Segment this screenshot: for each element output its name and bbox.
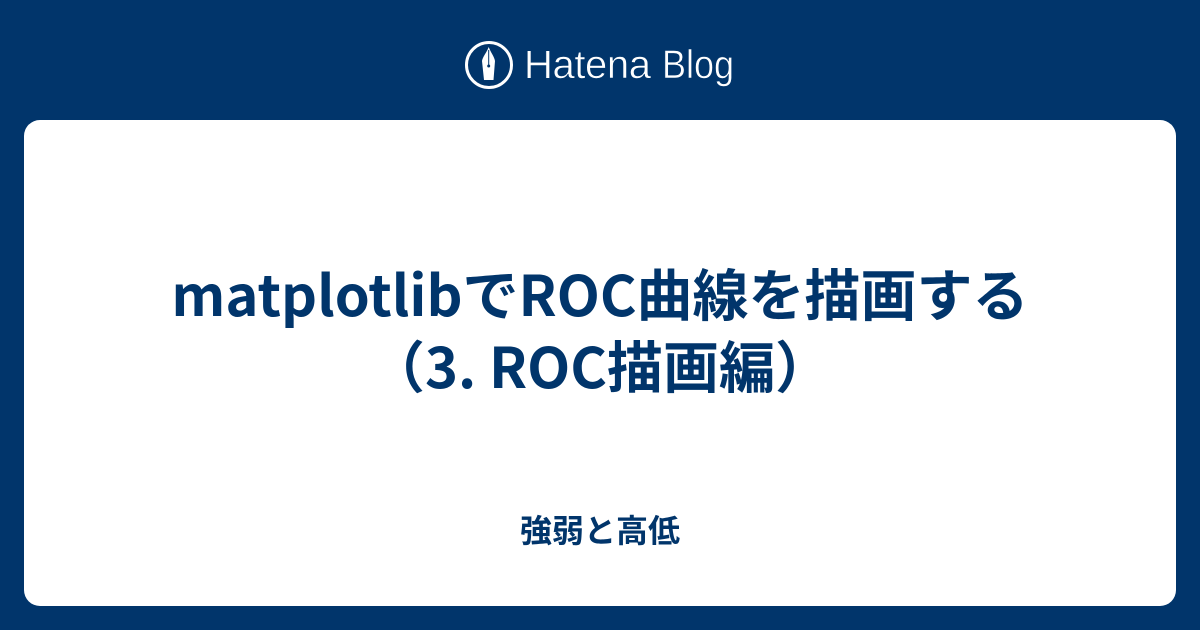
panel: white card [24, 120, 1176, 606]
title: matplotlibでROC曲線を描画する [171, 252, 1029, 333]
title [171, 252, 1029, 405]
blog name: 強弱と高低 [520, 506, 680, 552]
logo wordmark [524, 43, 734, 87]
logo: Hatena Blog [465, 41, 734, 89]
logo wordmark: Hatena [524, 43, 651, 87]
icon: pen nib in circle [465, 41, 513, 89]
logo wordmark: Blog [662, 43, 734, 87]
title: （3. ROC描画編） [369, 324, 831, 405]
